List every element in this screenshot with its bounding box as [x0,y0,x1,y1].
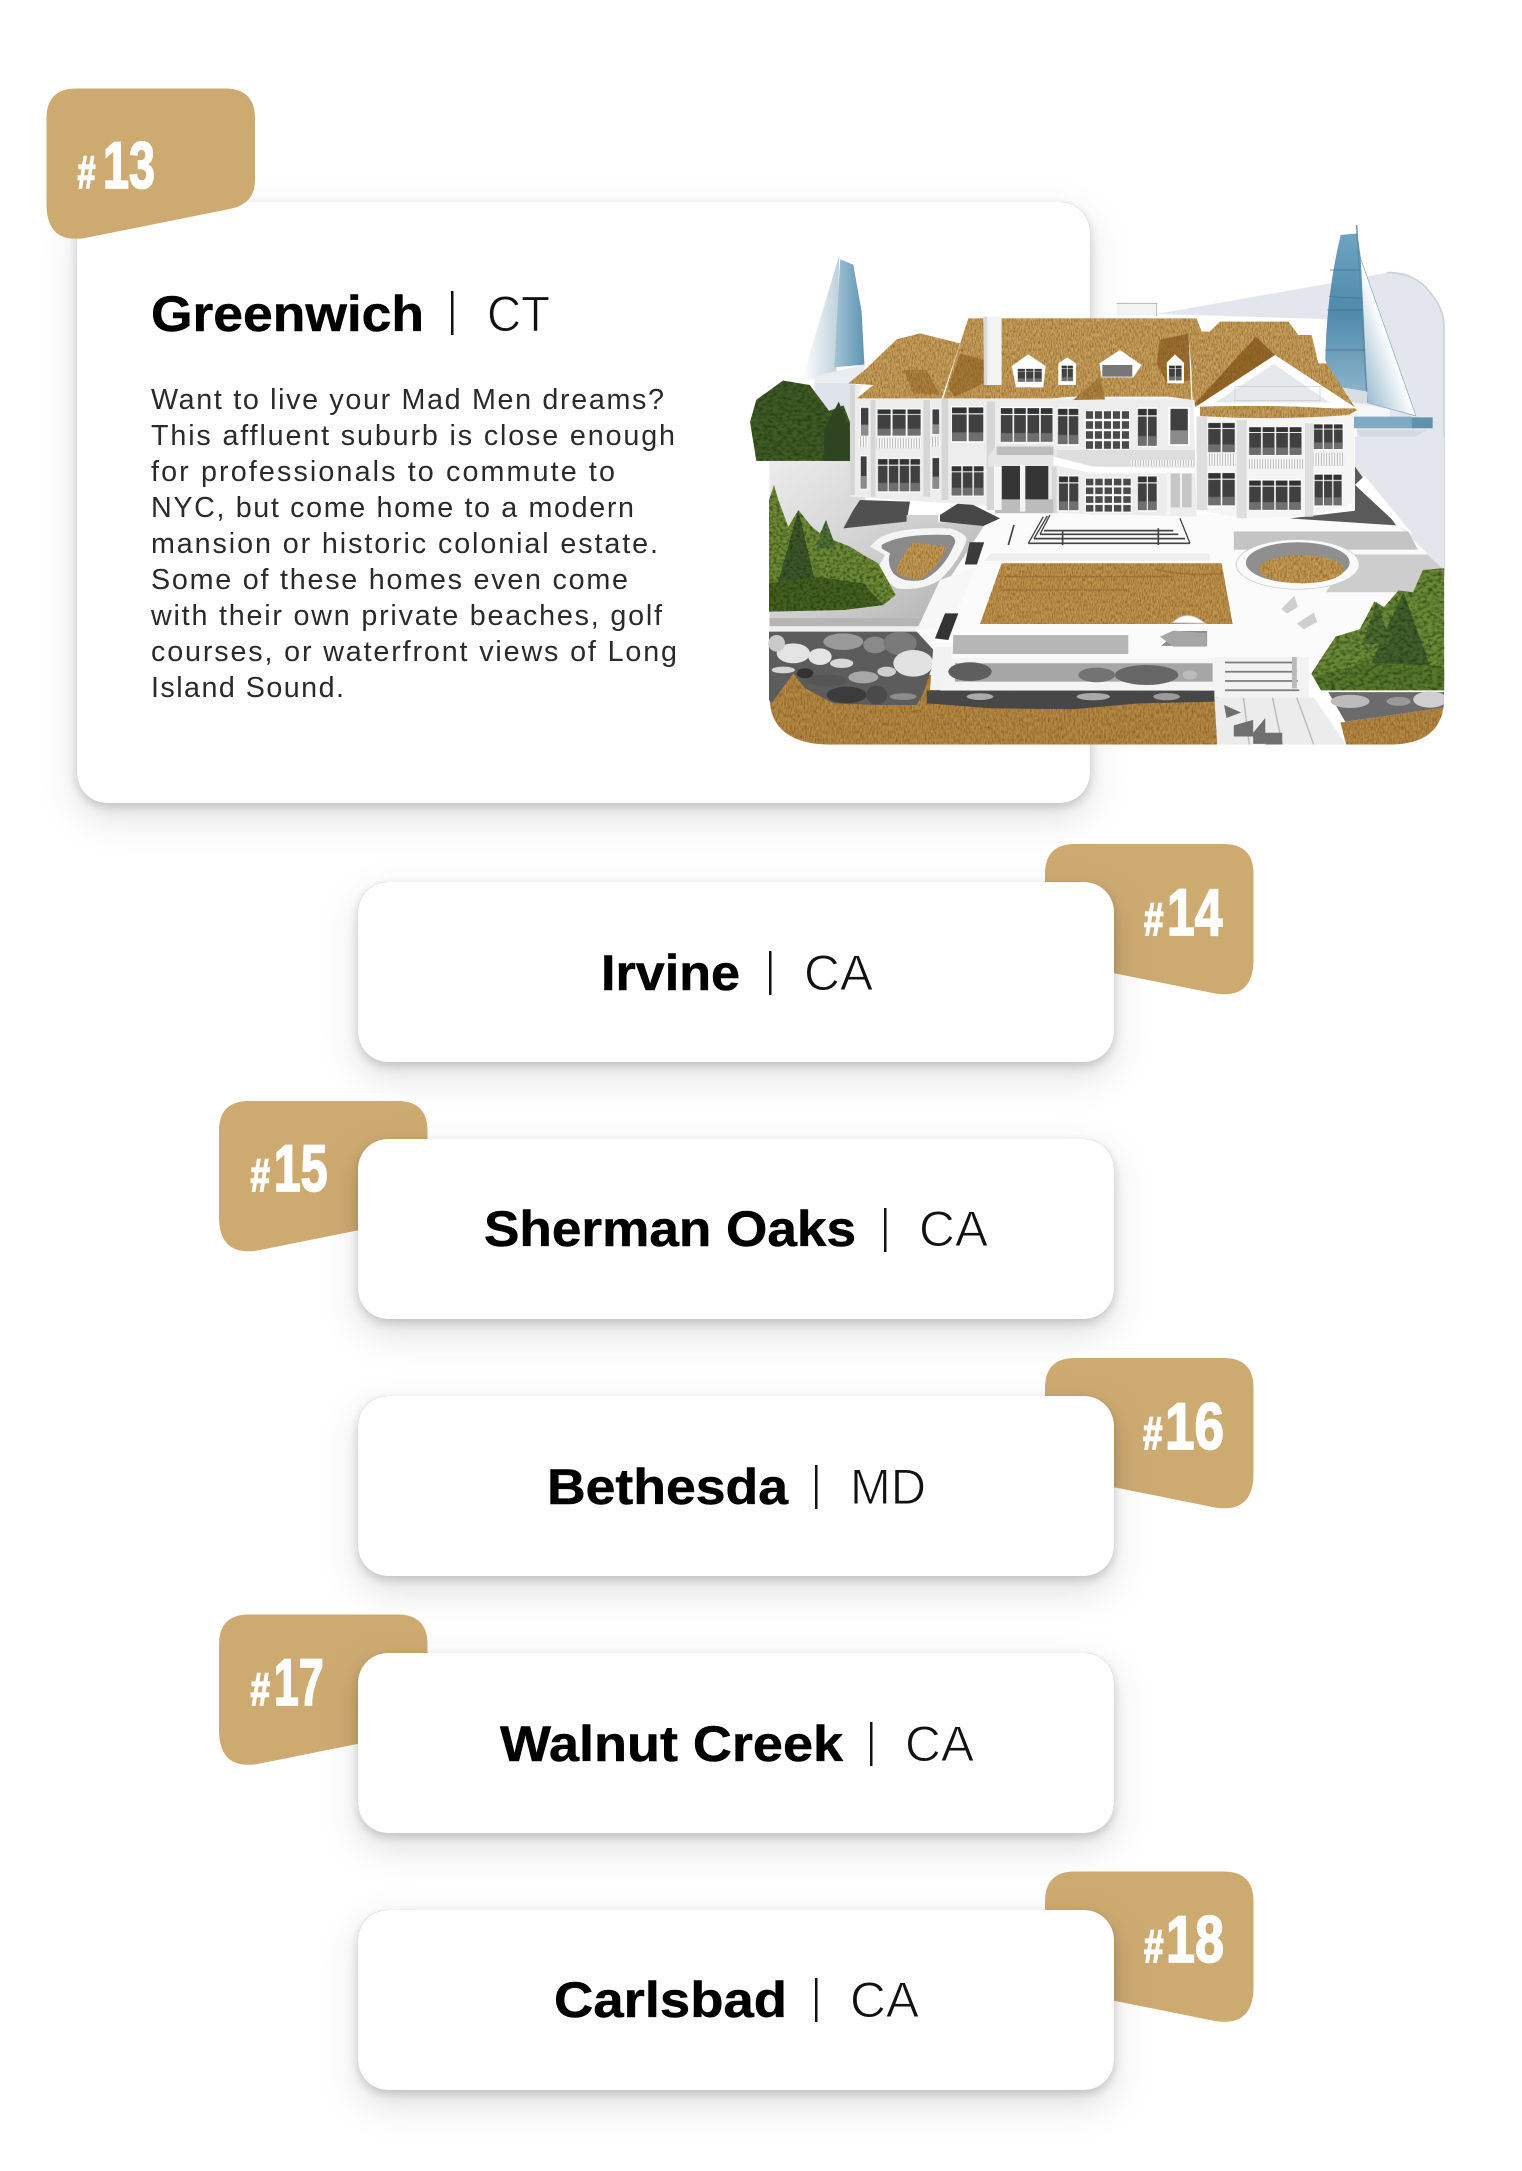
badge: #16: # [1143,1407,1162,1459]
gold roof [848,317,1357,418]
balcony rails [859,436,940,448]
rocks right [1328,691,1447,722]
porch and terrace base [988,445,1057,467]
badge: #17: 17 [274,1645,324,1719]
walkway [917,567,977,630]
badge: #15 [219,1101,428,1251]
roof: right wing and gable [1188,322,1357,418]
grey reflecting pool [953,635,1128,654]
icon: left sailboat [801,256,865,466]
trees: upper left [750,381,850,461]
panel: Carlsbad card: CA [850,1972,920,2028]
roof: main and left wing [848,317,1202,400]
text block: Greenwich description: Some of these homes even come [151,564,628,596]
panel: Greenwich card [46,88,1090,803]
text block: Greenwich description: mansion or historic colonial estate. [151,528,658,560]
terrace and grounds [764,437,1444,745]
left pool [870,528,967,589]
text block: Greenwich description: Island Sound. [151,672,344,704]
heading: Greenwich CT: CT [487,286,550,342]
stairs to terrace [1008,515,1190,545]
house terrace details [953,515,1233,654]
gold foreground lawn [764,666,1217,745]
badge: #15: 15 [274,1131,328,1205]
rocks [768,632,937,705]
badge: #13 [46,88,255,239]
grid windows [1058,410,1157,513]
lounge set [1160,631,1207,647]
panel: Carlsbad card: Carlsbad [554,1972,787,2028]
garden steps [1214,657,1309,698]
panel: Irvine card: CA [804,945,874,1001]
badge: #16: 16 [1165,1389,1224,1463]
text block: Greenwich description: for professionals to commute to [151,456,615,488]
background: pale blue sky shape and right sailboat [1157,225,1444,577]
dock [1214,698,1346,745]
panel: Irvine card [358,882,1114,1062]
gold lawn pool [980,563,1233,624]
umbrella and chairs [1161,596,1317,646]
round pool [1236,540,1359,589]
panel: Sherman Oaks card [358,1139,1114,1319]
upper windows [860,406,1190,497]
badge: #18: 18 [1166,1902,1224,1976]
text block: Greenwich description [150,384,677,704]
badge: #14: 14 [1167,875,1223,949]
panel: Carlsbad card [358,1910,1114,2090]
heading: Greenwich CT: Greenwich [151,286,424,342]
text block: Greenwich description: NYC, but come home to a modern [151,492,634,524]
badge: #18: # [1144,1920,1164,1972]
panel: Walnut Creek card: CA [905,1716,975,1772]
badge: #13: 13 [103,128,155,202]
house: main block [850,385,1197,517]
badge: #13: # [78,146,96,198]
icon: rear chimney [1117,303,1157,316]
badge: #16 [1045,1358,1254,1508]
panel: Bethesda card: MD [850,1459,926,1515]
dock, steps and right rocks [1214,657,1447,745]
terrace wall with boulders [927,647,1218,709]
text block: Greenwich description: with their own private beaches, golf [150,600,663,632]
illustration: mansion with gold roof [750,225,1447,745]
panel: Walnut Creek card: Walnut Creek [500,1716,843,1772]
text block: Greenwich description: Want to live your Mad Men dreams? [151,384,664,416]
text block: Greenwich description: This affluent suburb is close enough [151,420,675,452]
trees: lower left [769,485,896,612]
panel: Bethesda card: Bethesda [547,1459,789,1515]
badge: #17: # [250,1663,270,1715]
heading: Greenwich CT [151,286,550,342]
chimney [983,317,1002,385]
planters [843,500,910,528]
panel: Sherman Oaks card: Sherman Oaks [484,1201,856,1257]
left lawn planters, pool and rocks [768,500,1000,705]
badge: #14 [1045,844,1254,994]
text block: Greenwich description: courses, or waterfront views of Long [151,636,677,668]
badge: #14: # [1144,893,1164,945]
badge: #18 [1045,1872,1254,2022]
badge: #17 [219,1614,428,1765]
panel: Walnut Creek card [358,1653,1114,1833]
panel: Sherman Oaks card: CA [919,1201,989,1257]
panel: Bethesda card [358,1396,1114,1576]
dormers [1012,350,1184,387]
panel: Irvine card: Irvine [601,945,740,1001]
badge: #15: # [250,1149,270,1201]
umbrella [1173,616,1205,623]
house: right bay [1197,414,1354,518]
trees: lower right [1311,568,1444,690]
trees [750,381,1444,690]
